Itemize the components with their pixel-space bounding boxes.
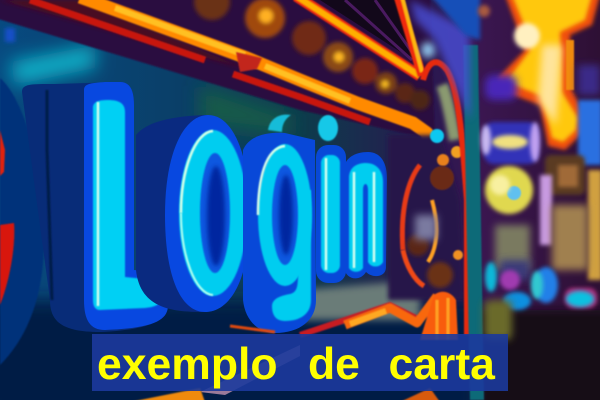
lower foreground streaks [130,345,440,400]
blurred slot machines [481,65,600,340]
caption text: carta [388,340,496,389]
top marquee neon frame [296,0,422,76]
orange tube highlight [115,8,350,101]
letter g [243,133,316,333]
neon word Login [22,82,387,333]
orange neon tube [80,0,434,162]
red neon tube [30,0,370,122]
caption bar [92,334,508,391]
upper marquee panel [0,0,435,140]
caption text: exemplo [97,340,278,389]
letter n [344,152,387,278]
letter o [136,115,250,312]
red tube clip [236,52,262,72]
letter L [22,82,168,332]
letter i [268,115,346,283]
red arc tube [423,62,467,335]
neon lamp panel [388,42,464,300]
blurred star sign [478,0,600,150]
left blue panel [0,78,44,365]
caption text: de [308,340,360,389]
teal post [410,0,484,400]
lower neon tubes [230,292,458,340]
marquee bulbs [194,0,430,110]
